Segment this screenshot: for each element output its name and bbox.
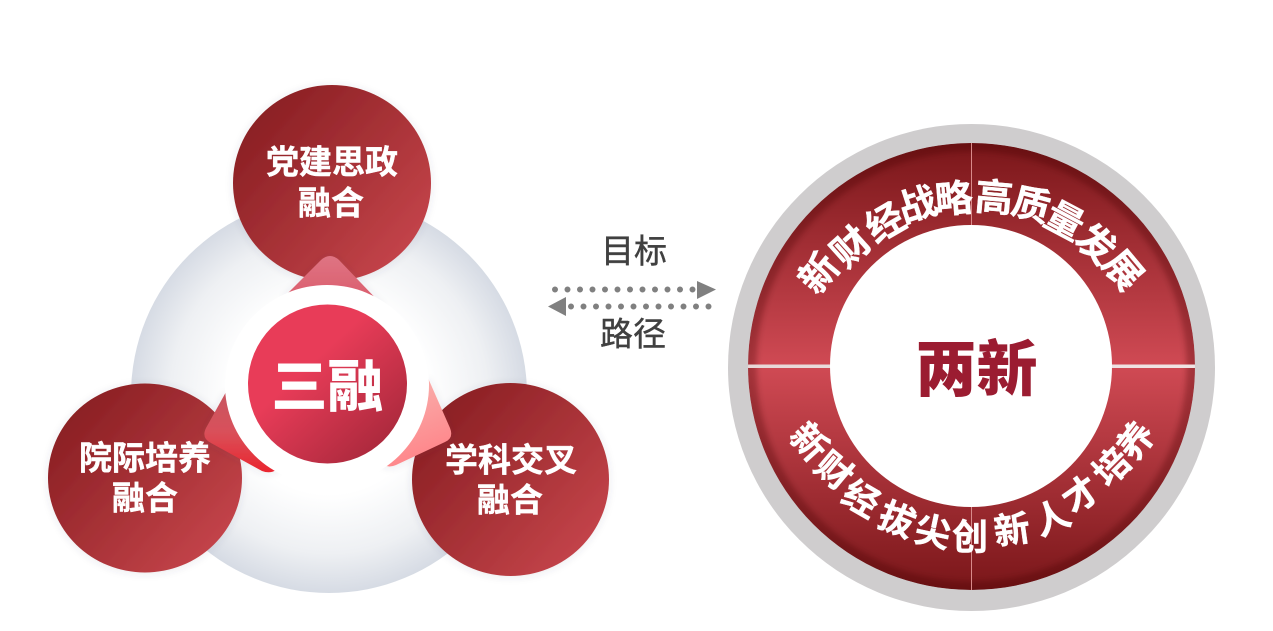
circle: party building and ideology integration: [233, 85, 431, 281]
curved text: high-quality development of new finance strategy: 量: [1037, 195, 1091, 249]
inner white circle: [830, 225, 1112, 507]
centre circle: three integrations: 三融: [272, 342, 384, 424]
curved text: high-quality development of new finance strategy: 财: [824, 220, 880, 276]
circle: interdisciplinary integration: 学科交叉: [445, 442, 577, 478]
curved text: top-tier innovative new finance talent training: 培: [1085, 440, 1139, 494]
circle: party building and ideology integration: 融合: [298, 184, 364, 222]
curved text: top-tier innovative new finance talent training: [782, 414, 1163, 558]
curved text: top-tier innovative new finance talent training: 新: [991, 507, 1033, 553]
curved text: high-quality development of new finance strategy: [792, 176, 1150, 302]
curved text: high-quality development of new finance strategy: 质: [1007, 181, 1055, 231]
curved text: high-quality development of new finance strategy: 展: [1094, 243, 1150, 299]
circle: interdisciplinary integration: [412, 383, 609, 576]
curved text: high-quality development of new finance strategy: 新: [792, 246, 848, 302]
panel: three integrations diagram: [48, 85, 609, 593]
rounded triangle behind the centre: [204, 256, 451, 472]
curved text: high-quality development of new finance strategy: 高: [973, 176, 1015, 222]
curved text: top-tier innovative new finance talent training: 拔: [873, 494, 921, 546]
curved text: top-tier innovative new finance talent training: 才: [1054, 468, 1108, 522]
heading: two new: 两新: [915, 320, 1038, 408]
panel: two new ring diagram: [728, 124, 1215, 611]
red ring: [748, 143, 1195, 590]
centre circle: three integrations: [225, 285, 429, 485]
circle: inter-institution training integration: 融合: [112, 480, 178, 516]
circle: inter-institution training integration: 院际培养: [79, 440, 211, 476]
curved text: top-tier innovative new finance talent training: 养: [1109, 414, 1163, 468]
curved text: top-tier innovative new finance talent training: 创: [952, 516, 988, 558]
curved text: high-quality development of new finance strategy: 经: [859, 196, 913, 252]
label: path: 路径: [600, 316, 666, 352]
circle: interdisciplinary integration: 融合: [477, 482, 543, 518]
curved text: high-quality development of new finance strategy: 战: [893, 180, 943, 232]
curved text: top-tier innovative new finance talent training: 尖: [911, 508, 955, 556]
curved text: high-quality development of new finance strategy: 发: [1067, 217, 1123, 273]
curved text: top-tier innovative new finance talent training: 人: [1028, 492, 1076, 544]
label: goal: 目标: [601, 232, 667, 270]
outer grey ring: [728, 124, 1215, 611]
circle: inter-institution training integration: [48, 384, 242, 572]
arrow: dotted right arrow: [555, 281, 716, 299]
curved text: top-tier innovative new finance talent training: 经: [835, 472, 887, 526]
curved text: high-quality development of new finance strategy: 略: [933, 177, 975, 223]
curved text: top-tier innovative new finance talent training: 财: [807, 444, 861, 498]
curved text: top-tier innovative new finance talent training: 新: [782, 415, 836, 469]
arrow: dotted left arrow: [548, 297, 709, 316]
background disc: [131, 197, 527, 593]
circle: party building and ideology integration: 党建思政: [266, 144, 398, 180]
